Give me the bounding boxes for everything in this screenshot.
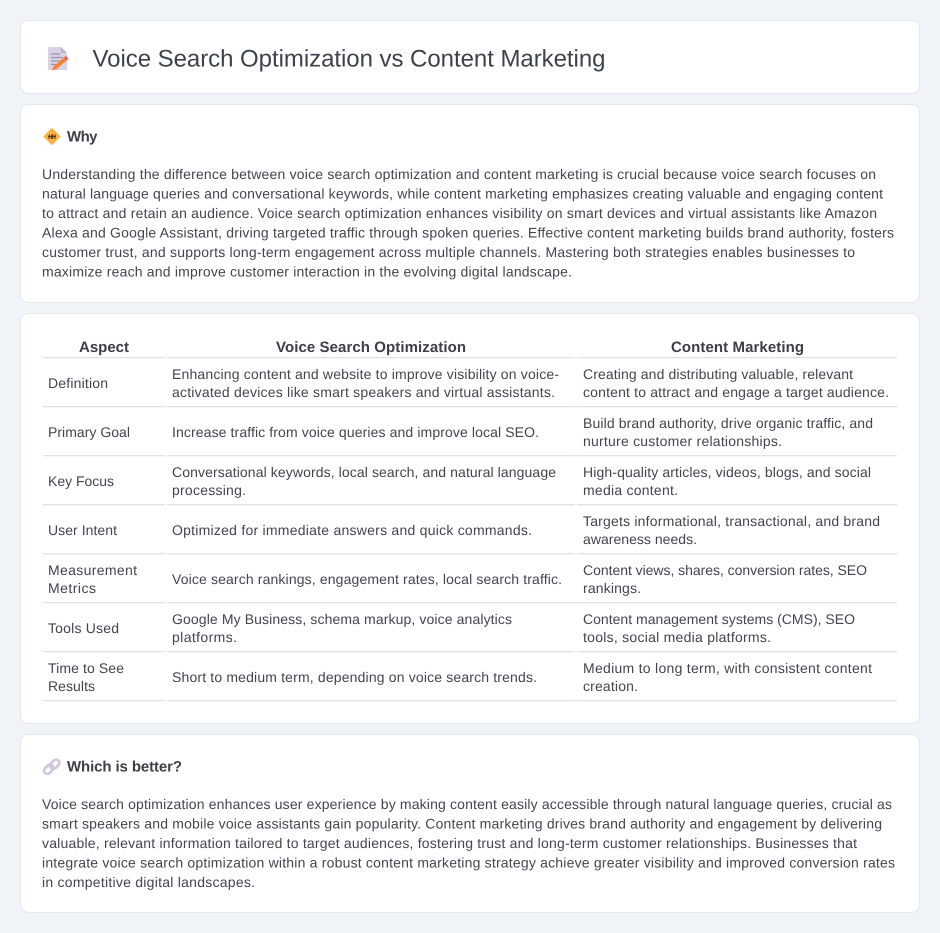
row: user intent: User Intent xyxy=(48,522,117,538)
row: time to see results: creation. xyxy=(583,678,638,694)
row: definition: Enhancing content and website to improve visibility on voice- xyxy=(172,366,559,382)
text block: why paragraph: Alexa and Google Assistant, driving targeted traffic through spoken queries. Effective content marketing builds brand authority, fosters xyxy=(42,224,894,240)
panel: which is better xyxy=(20,734,920,912)
row: definition: Definition xyxy=(48,375,108,391)
row: measurement metrics: Metrics xyxy=(48,580,96,596)
row: definition xyxy=(43,366,897,407)
text block: which is better paragraph: Voice search optimization enhances user experience by making content easily accessible through natural language queries, crucial as xyxy=(42,796,892,812)
row: key focus xyxy=(43,464,897,505)
text block: why paragraph: maximize reach and improve customer interaction in the evolving digital landscape. xyxy=(42,263,572,279)
row: time to see results xyxy=(43,660,897,701)
heading: which is better: Which is better? xyxy=(67,759,182,776)
row: tools used: Tools Used xyxy=(48,620,119,636)
row: tools used: tools, social media platforms. xyxy=(583,629,771,645)
text block: why paragraph xyxy=(42,166,894,279)
row: time to see results: Time to See xyxy=(48,660,124,676)
row: time to see results: Results xyxy=(48,678,95,694)
icon: document with pencil xyxy=(48,47,68,70)
row: definition: Creating and distributing valuable, relevant xyxy=(583,366,853,382)
heading: why: Why xyxy=(67,129,98,146)
row: measurement metrics: Measurement xyxy=(48,562,137,578)
row: key focus: Key Focus xyxy=(48,473,114,489)
row: measurement metrics: Voice search rankings, engagement rates, local search traffic. xyxy=(172,571,562,587)
row: time to see results: Short to medium term, depending on voice search trends. xyxy=(172,669,537,685)
table header row: Voice Search Optimization xyxy=(276,339,466,356)
text block: which is better paragraph: integrate voice search optimization within a robust content marketing strategy achieve greater visibility and improved conversion rates xyxy=(42,854,895,870)
text block: which is better paragraph: smart speakers and mobile voice assistants gain popularity. Content marketing drives brand authority and engagement by delivering xyxy=(42,815,882,831)
row: measurement metrics: Content views, shares, conversion rates, SEO xyxy=(583,562,867,578)
icon: warning diamond xyxy=(44,128,60,144)
title: Voice Search Optimization vs Content Marketing xyxy=(92,46,606,72)
row: key focus: High-quality articles, videos, blogs, and social xyxy=(583,464,871,480)
row: user intent: Targets informational, transactional, and brand xyxy=(583,513,880,529)
row: time to see results: Medium to long term, with consistent content xyxy=(583,660,872,676)
row: tools used: Google My Business, schema markup, voice analytics xyxy=(172,611,512,627)
panel: why xyxy=(20,104,920,302)
text block: which is better paragraph xyxy=(42,796,895,890)
row: key focus: Conversational keywords, local search, and natural language xyxy=(172,464,556,480)
row: measurement metrics xyxy=(43,562,897,603)
icon: chain link xyxy=(43,758,61,775)
row: primary goal xyxy=(43,415,897,456)
text block: why paragraph: to attract and retain an audience. Voice search optimization enhances visibility on smart devices and virtual assistants like Amazon xyxy=(42,205,877,221)
panel: comparison table xyxy=(20,314,920,724)
table header row: Content Marketing xyxy=(671,339,804,356)
row: measurement metrics: rankings. xyxy=(583,580,641,596)
row: tools used xyxy=(43,611,897,652)
text block: which is better paragraph: valuable, relevant information tailored to target audiences, fostering trust and long-term customer relationships. Businesses that xyxy=(42,835,857,851)
row: primary goal: Build brand authority, drive organic traffic, and xyxy=(583,415,873,431)
row: user intent: awareness needs. xyxy=(583,531,697,547)
row: primary goal: Increase traffic from voice queries and improve local SEO. xyxy=(172,424,539,440)
row: primary goal: Primary Goal xyxy=(48,424,130,440)
row: definition: content to attract and engage a target audience. xyxy=(583,384,889,400)
table header row: Aspect xyxy=(79,339,129,356)
row: tools used: platforms. xyxy=(172,629,237,645)
text block: which is better paragraph: in competitive digital landscapes. xyxy=(42,874,255,890)
row: user intent xyxy=(43,513,897,554)
panel: title header xyxy=(20,20,920,94)
row: primary goal: nurture customer relationships. xyxy=(583,433,782,449)
text block: why paragraph: customer trust, and supports long-term engagement across multiple channels. Mastering both strategies enables businesses to xyxy=(42,244,855,260)
row: key focus: media content. xyxy=(583,482,678,498)
table header row xyxy=(43,339,897,358)
row: definition: activated devices like smart speakers and virtual assistants. xyxy=(172,384,555,400)
text block: why paragraph: Understanding the difference between voice search optimization and content marketing is crucial because voice search focuses on xyxy=(42,166,876,182)
row: user intent: Optimized for immediate answers and quick commands. xyxy=(172,522,532,538)
text block: why paragraph: natural language queries and conversational keywords, while content marketing emphasizes creating valuable and engaging content xyxy=(42,185,883,201)
row: tools used: Content management systems (CMS), SEO xyxy=(583,611,855,627)
row: key focus: processing. xyxy=(172,482,246,498)
